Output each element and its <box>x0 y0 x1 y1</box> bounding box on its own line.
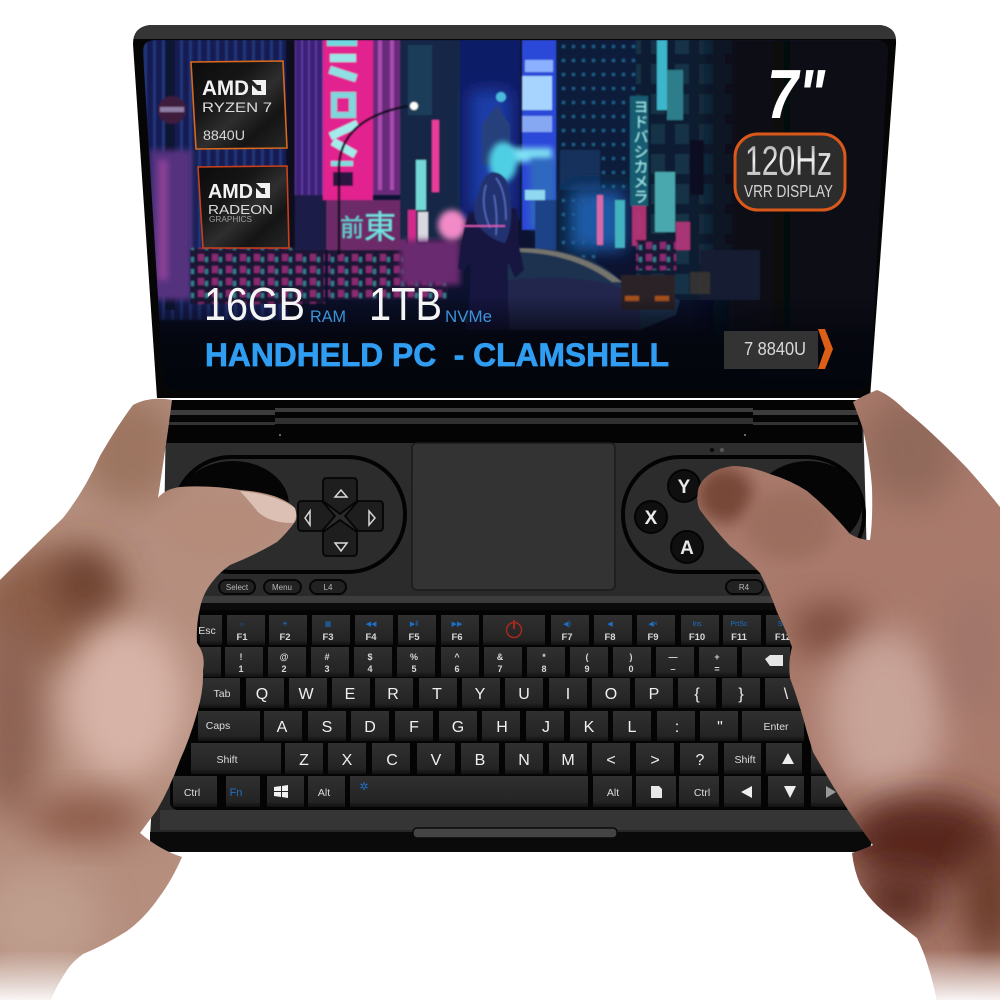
ZXCV row: Shift <box>216 754 238 766</box>
d-pad <box>298 478 383 556</box>
badge: AMD Radeon Graphics: GRAPHICS <box>209 215 252 224</box>
number key row: – <box>670 664 676 674</box>
left hand <box>0 390 310 1000</box>
function key row: ☼ <box>239 621 245 628</box>
ZXCV row: Z <box>299 752 309 769</box>
function key row: ☀ <box>282 620 288 628</box>
function key row: F1 <box>236 632 248 643</box>
spec: 1TB NVMe: NVMe <box>445 307 492 326</box>
number key row: ! <box>240 652 242 662</box>
badge: 120Hz VRR display: 120Hz <box>745 137 832 184</box>
storefront with neon kanji: 前 <box>340 215 364 242</box>
ASDF row: K <box>584 719 595 736</box>
function key row: F5 <box>408 632 420 643</box>
ASDF row <box>198 711 804 741</box>
right analog stick <box>754 461 862 549</box>
ASDF row: S <box>322 719 332 736</box>
function key row: Ins <box>692 621 702 628</box>
ZXCV row: < <box>606 752 616 769</box>
function key row: Esc <box>198 625 216 637</box>
front lip and latch <box>150 810 872 852</box>
QWERTY row: R <box>387 686 399 703</box>
number key row <box>200 647 790 677</box>
number key row: 1 <box>238 664 244 674</box>
function key row: F6 <box>451 632 463 643</box>
QWERTY row: Y <box>475 686 486 703</box>
function key row: F10 <box>689 632 705 643</box>
function key row: ◀ <box>607 621 613 628</box>
left buildings <box>143 40 325 320</box>
QWERTY row: P <box>649 686 659 703</box>
headline: HANDHELD PC - CLAMSHELL <box>205 337 669 373</box>
badge: AMD Radeon Graphics: AMD <box>208 181 253 203</box>
ZXCV row: > <box>650 752 660 769</box>
ASDF row: F <box>409 719 419 736</box>
function key row: F8 <box>604 632 616 643</box>
number key row: + <box>714 652 720 662</box>
number key row: @ <box>280 652 289 662</box>
bottom key row: Ctrl <box>184 787 200 799</box>
badge: AMD Radeon Graphics <box>198 166 289 248</box>
spec: 16GB RAM: 16GB <box>204 278 305 330</box>
number key row: $ <box>367 652 373 662</box>
right teal signage <box>629 40 888 329</box>
ASDF row: Caps <box>206 720 230 732</box>
ZXCV row: M <box>561 752 575 769</box>
function key row: ▶▶ <box>452 621 463 628</box>
left control capsule <box>174 457 405 572</box>
function key row: ▶‖ <box>410 621 418 628</box>
badge: AMD Ryzen 7 8840U: 8840U <box>203 127 245 143</box>
device lid with bezel <box>133 25 896 398</box>
storefront with neon kanji <box>326 200 448 300</box>
ASDF row: G <box>452 719 464 736</box>
function key row <box>198 615 804 645</box>
bottom key row: Fn <box>230 787 242 799</box>
keyboard <box>168 596 862 810</box>
storefront with neon kanji: 東 <box>364 209 396 245</box>
QWERTY row: I <box>566 686 570 703</box>
number key row: ^ <box>454 652 460 662</box>
QWERTY row: Q <box>256 686 268 703</box>
badge: AMD Ryzen 7 8840U: AMD <box>202 77 249 100</box>
ZXCV row: X <box>342 752 353 769</box>
ASDF row: A <box>277 719 288 736</box>
ASDF row: " <box>717 719 723 736</box>
number key row: 8 <box>541 664 547 674</box>
QWERTY row <box>200 678 803 708</box>
number key row: 2 <box>281 664 287 674</box>
QWERTY row: } <box>738 686 744 703</box>
number key row: — <box>668 652 678 662</box>
function key row: F3 <box>322 632 334 643</box>
badge: AMD Ryzen 7 8840U <box>191 61 287 149</box>
small function buttons: Select <box>226 583 249 592</box>
ASDF row: H <box>496 719 508 736</box>
right control capsule <box>623 448 864 572</box>
screen wallpaper: neon city <box>140 38 892 392</box>
number key row: * <box>542 652 546 662</box>
small function buttons: R4 <box>739 583 750 592</box>
ASDF row: Enter <box>763 721 789 733</box>
ZXCV row: B <box>475 752 485 769</box>
ASDF row: D <box>364 719 376 736</box>
number key row: % <box>410 652 418 662</box>
function key row: ▦ <box>325 621 331 628</box>
number key row: 3 <box>324 664 330 674</box>
badge: AMD Ryzen 7 8840U: RYZEN 7 <box>202 99 272 115</box>
spec: 1TB NVMe <box>369 278 492 330</box>
small function buttons: L4 <box>324 583 333 592</box>
badge: 120Hz VRR display: VRR DISPLAY <box>744 181 833 201</box>
pink neon sign <box>323 40 400 200</box>
function key row: F4 <box>365 632 377 643</box>
QWERTY row: E <box>345 686 355 703</box>
bottom key row: ✲ <box>359 781 369 793</box>
face button X <box>635 501 667 533</box>
function key row: F7 <box>561 632 573 643</box>
number key row: 5 <box>411 664 417 674</box>
QWERTY row: O <box>605 686 617 703</box>
face button Y <box>668 470 700 502</box>
car <box>460 248 680 330</box>
QWERTY row: W <box>298 686 314 703</box>
ZXCV row: Shift <box>734 754 756 766</box>
face button A: A <box>680 538 694 559</box>
spec: 16GB RAM: RAM <box>310 307 346 326</box>
tag: 7 8840U with arrow <box>724 329 833 369</box>
ZXCV row: N <box>518 752 530 769</box>
number key row: 0 <box>628 664 634 674</box>
small function buttons <box>219 580 763 594</box>
face button A <box>671 531 703 563</box>
number key row: 6 <box>454 664 460 674</box>
woman figure <box>458 172 524 330</box>
screen size: 7 inch: 7" <box>767 55 826 133</box>
function key row: F11 <box>731 632 748 643</box>
bottom key row <box>173 776 849 807</box>
ASDF row: J <box>542 719 550 736</box>
number key row: # <box>324 652 330 662</box>
QWERTY row: T <box>432 686 442 703</box>
bottom key row: Alt <box>607 787 619 799</box>
right teal signage: ヨドバシカメラ <box>632 99 648 204</box>
right hand <box>690 385 1000 1000</box>
function key row: PrtSc <box>730 621 748 628</box>
number key row: & <box>497 652 504 662</box>
tag: 7 8840U with arrow: 7 8840U <box>744 339 806 359</box>
function key row: ◀◀ <box>366 621 377 628</box>
number key row: 9 <box>584 664 590 674</box>
function key row: ◀) <box>563 621 571 628</box>
spec: 1TB NVMe: 1TB <box>369 278 442 330</box>
ZXCV row <box>191 743 831 774</box>
badge: 120Hz VRR display <box>735 134 845 210</box>
QWERTY row: Tab <box>214 688 231 700</box>
number key row: 7 <box>497 664 503 674</box>
left analog stick <box>177 461 289 549</box>
ASDF row: : <box>675 719 679 736</box>
bottom key row: Ctrl <box>694 787 710 799</box>
number key row: ( <box>586 652 588 662</box>
street lamp <box>339 102 418 255</box>
ASDF row: L <box>628 719 637 736</box>
touchpad <box>412 443 615 590</box>
badge: AMD Radeon Graphics: RADEON <box>208 203 273 217</box>
face button X: X <box>645 508 658 529</box>
ZXCV row: V <box>431 752 442 769</box>
function key row: Scr <box>778 621 789 628</box>
ZXCV row: ? <box>696 752 705 769</box>
function key row: F12 <box>775 632 791 643</box>
hinge <box>166 400 862 443</box>
centre street <box>400 40 636 285</box>
QWERTY row: U <box>518 686 530 703</box>
number key row: ) <box>630 652 632 662</box>
QWERTY row: \ <box>784 686 789 703</box>
number key row: = <box>714 664 720 674</box>
face button Y: Y <box>678 477 691 498</box>
QWERTY row: { <box>694 686 700 703</box>
ZXCV row: C <box>386 752 398 769</box>
function key row: F9 <box>647 632 659 643</box>
bottom key row: Alt <box>318 787 330 799</box>
function key row: ◀× <box>648 621 658 628</box>
device base <box>150 400 872 852</box>
small function buttons: Menu <box>272 583 292 592</box>
function key row: F2 <box>279 632 291 643</box>
number key row: 4 <box>367 664 373 674</box>
